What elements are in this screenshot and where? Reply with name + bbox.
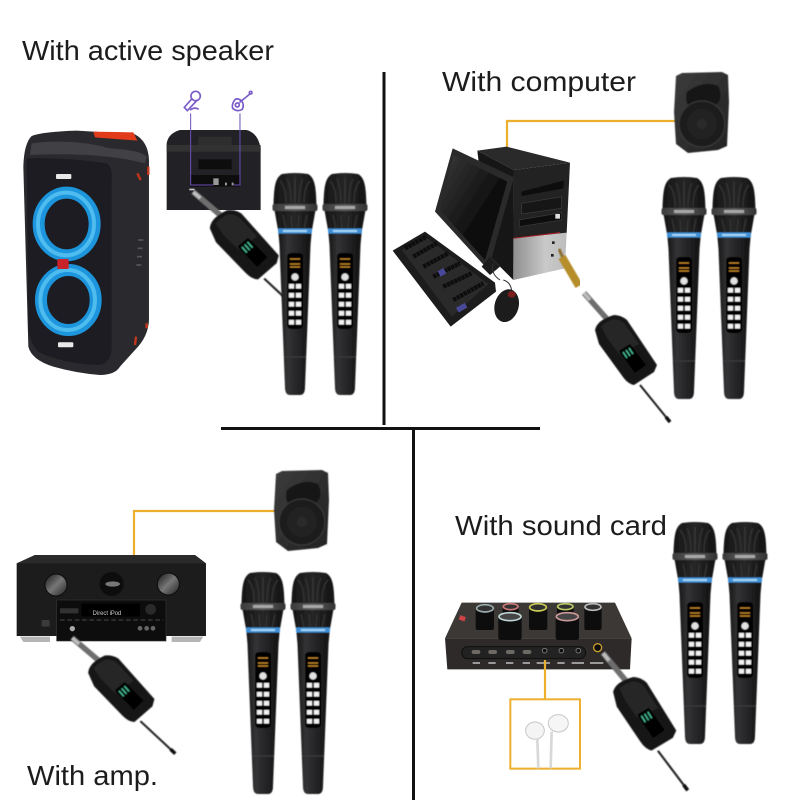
heading: with amp: With amp. xyxy=(27,760,158,791)
icon: transmitter xyxy=(193,179,300,325)
panel: with amp xyxy=(17,470,335,794)
panel: with computer xyxy=(393,66,756,422)
icon: amplifier xyxy=(17,555,206,642)
connector: yellow cable xyxy=(134,511,275,557)
microphone right xyxy=(712,177,756,399)
microphone right xyxy=(322,173,368,395)
microphone right xyxy=(290,572,336,794)
icon: desktop computer xyxy=(393,147,570,327)
icon: transmitter xyxy=(72,626,175,766)
icon: sound card xyxy=(445,603,632,669)
panel: with active speaker xyxy=(22,35,368,395)
microphone left xyxy=(272,173,318,395)
icon: earphones in yellow frame xyxy=(510,699,580,769)
icon: purple microphone xyxy=(184,91,200,111)
divider: horizontal xyxy=(221,427,540,430)
connector: yellow cable to earphones xyxy=(544,660,546,700)
icon: party speaker xyxy=(23,131,149,375)
icon: transmitter xyxy=(584,293,670,422)
speaker rear panel with jack xyxy=(167,113,261,210)
panel: with sound card xyxy=(445,510,768,790)
microphone left xyxy=(240,572,286,794)
microphone right xyxy=(722,522,768,744)
icon: purple guitar xyxy=(232,91,252,111)
icon: loudspeaker xyxy=(274,470,329,551)
divider: bottom vertical xyxy=(412,430,415,800)
divider: top vertical xyxy=(382,72,386,425)
microphone left xyxy=(662,177,706,399)
icon: transmitter xyxy=(598,653,692,790)
connector: yellow cable xyxy=(507,121,675,147)
microphone left xyxy=(672,522,718,744)
heading: with sound card: With sound card xyxy=(455,510,667,541)
icon: gold adapter xyxy=(559,249,579,286)
icon: amplifier: Direct iPod xyxy=(93,611,121,617)
heading: with computer: With computer xyxy=(442,66,636,97)
icon: loudspeaker xyxy=(674,72,729,153)
heading: with active speaker: With active speaker xyxy=(22,35,274,66)
